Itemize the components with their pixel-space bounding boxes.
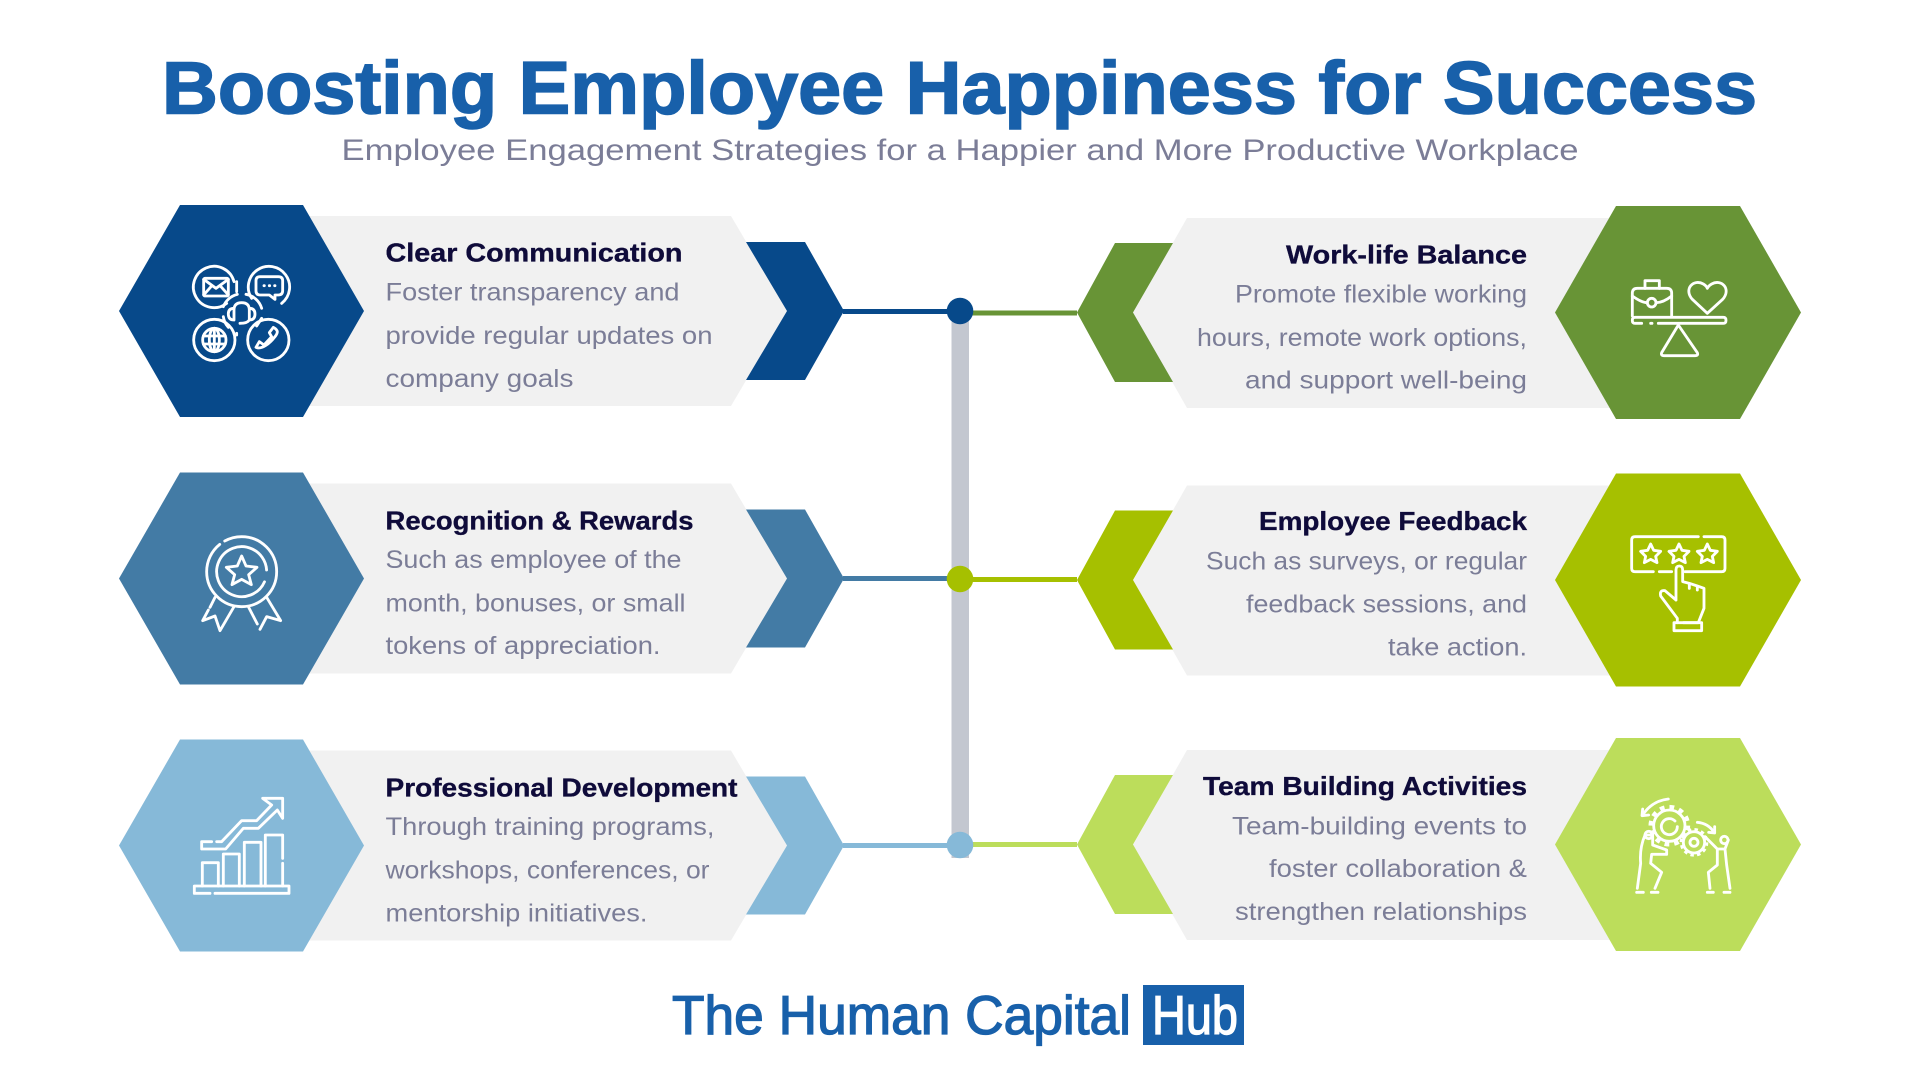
- body text: strengthen relationships: [1235, 898, 1527, 926]
- body text: [386, 278, 712, 393]
- panel: clear communication: [119, 205, 844, 417]
- heading: Professional Development: [386, 772, 738, 802]
- icon: award rosette: [203, 537, 281, 631]
- body text: foster collaboration &: [1269, 855, 1527, 883]
- heading: Team Building Activities: [1203, 771, 1527, 801]
- body text: tokens of appreciation.: [386, 632, 660, 660]
- body text: mentorship initiatives.: [386, 900, 648, 928]
- body text: [386, 546, 686, 660]
- heading: Work-life Balance: [1286, 240, 1527, 270]
- body text: provide regular updates on: [386, 322, 712, 350]
- body text: Such as employee of the: [386, 546, 682, 574]
- body text: Foster transparency and: [386, 278, 680, 306]
- body text: take action.: [1388, 634, 1527, 662]
- body text: feedback sessions, and: [1246, 590, 1527, 618]
- body text: and support well-being: [1245, 366, 1527, 394]
- body text: month, bonuses, or small: [386, 590, 686, 618]
- body text: Team-building events to: [1232, 812, 1527, 840]
- body text: [1232, 812, 1527, 926]
- heading: Employee Feedback: [1259, 506, 1528, 536]
- icon: star rating with pointing hand: [1632, 537, 1725, 631]
- panel: team building activities: [1077, 738, 1801, 951]
- body text: [1206, 548, 1527, 662]
- title: Boosting Employee Happiness for Success: [162, 46, 1757, 130]
- icon: communication channels: [193, 266, 290, 361]
- body text: hours, remote work options,: [1197, 324, 1527, 352]
- panel: work-life balance: [1077, 206, 1801, 419]
- body text: company goals: [386, 365, 574, 393]
- panel: employee feedback: [1077, 474, 1801, 686]
- body text: Promote flexible working: [1235, 280, 1527, 308]
- heading: Clear Communication: [386, 238, 682, 268]
- body text: workshops, conferences, or: [384, 856, 710, 884]
- icon: growth bar chart: [194, 798, 289, 893]
- icon: balance scale with briefcase and heart: [1632, 281, 1726, 356]
- icon: people turning gears: [1637, 799, 1730, 892]
- panel: professional development: [119, 740, 844, 952]
- body text: Through training programs,: [386, 813, 714, 841]
- panel: recognition and rewards: [119, 472, 844, 684]
- body text: [1197, 280, 1527, 394]
- logo: The Human Capital Hub: The Human Capital: [672, 984, 1131, 1046]
- central connector spine: [843, 298, 1077, 858]
- body text: [384, 813, 714, 928]
- body text: Such as surveys, or regular: [1206, 548, 1527, 576]
- logo: The Human Capital Hub: Hub: [1152, 984, 1238, 1046]
- heading: Recognition & Rewards: [386, 506, 694, 536]
- subtitle: Employee Engagement Strategies for a Happier and More Productive Workplace: [342, 134, 1578, 167]
